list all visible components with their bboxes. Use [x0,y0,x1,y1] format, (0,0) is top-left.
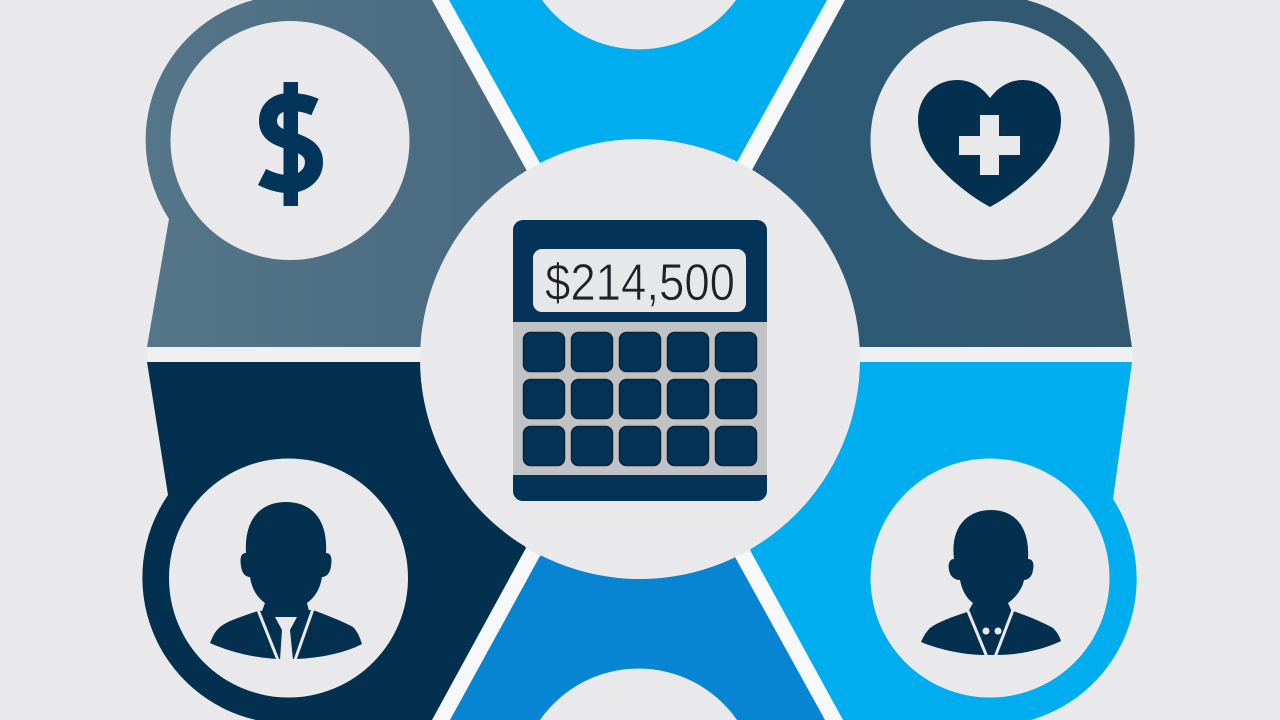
central circle [420,139,860,579]
panel: bottom-right cyan segment [750,362,1137,720]
calculator keys [524,332,756,466]
icon: heart with medical cross in circle [870,21,1110,260]
calculator base [513,475,767,501]
panel: top centre cyan segment [449,0,827,200]
panel: top-left slate segment [146,0,527,347]
icon: calculator [513,220,767,501]
icon: man with bow tie in circle [870,458,1110,698]
panel: bottom-left navy segment [142,362,526,720]
icon: dollar sign in circle [170,21,410,260]
calculator display [533,249,746,312]
display value: $214,500 [545,254,735,312]
calculator keypad body [513,318,767,478]
panel: bottom centre blue segment [450,520,825,720]
icon: man with tie in circle [169,458,408,698]
panel: top-right steel blue segment [752,0,1135,347]
calculator top housing [513,220,767,322]
